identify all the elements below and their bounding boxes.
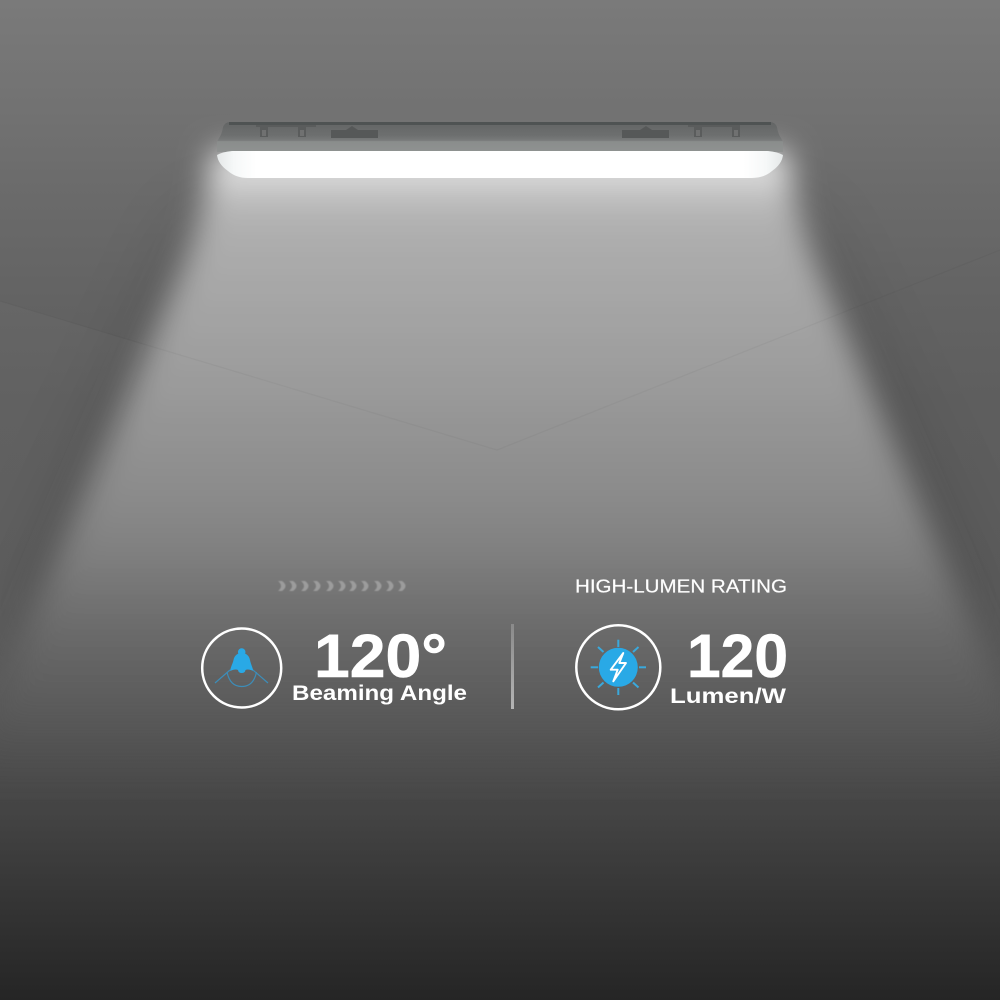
value: 120: 120 xyxy=(687,622,788,690)
label: lumen per watt: Lumen/W xyxy=(670,684,787,708)
icon: lightning sun xyxy=(576,625,660,709)
light beam xyxy=(0,150,1000,790)
right clips and latch xyxy=(622,125,740,138)
LED batten light fixture xyxy=(217,122,783,178)
wall shadow beside beam xyxy=(0,215,1000,640)
chevron row xyxy=(278,581,406,591)
divider xyxy=(511,624,514,709)
icon: beam angle lamp xyxy=(202,628,281,708)
fixture top edge xyxy=(229,122,771,125)
value: 120 degrees: 120° xyxy=(314,622,447,690)
stat: beaming angle xyxy=(202,581,467,708)
wall fold lines xyxy=(0,250,1000,450)
heading: high-lumen rating: HIGH-LUMEN RATING xyxy=(575,576,787,596)
label: beaming angle: Beaming Angle xyxy=(292,681,467,705)
fixture housing xyxy=(217,122,783,152)
left clips and latch xyxy=(256,125,378,138)
glowing diffuser xyxy=(217,151,783,178)
stat: lumen rating xyxy=(575,576,788,709)
